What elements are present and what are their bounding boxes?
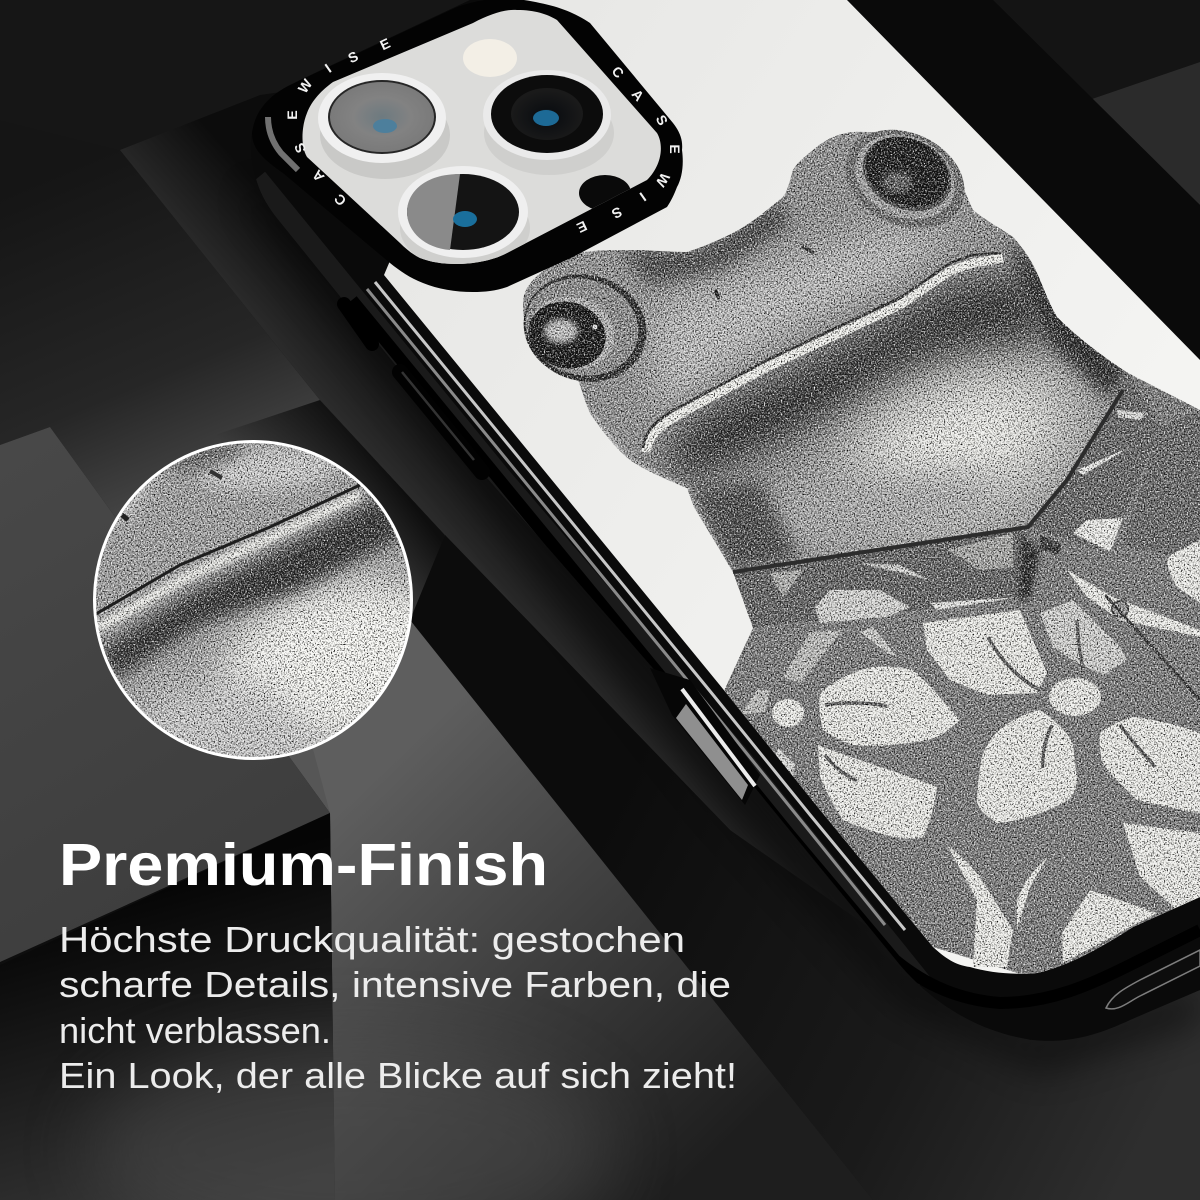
shadow band under lip bbox=[100, 495, 405, 680]
brand ring lettering: I bbox=[637, 189, 649, 205]
brand ring lettering: W bbox=[652, 170, 673, 191]
body text: scharfe Details, intensive Farben, die bbox=[59, 964, 731, 1005]
brand ring lettering: A bbox=[629, 86, 647, 104]
nostrils bbox=[715, 290, 719, 299]
lit muzzle bbox=[650, 225, 960, 420]
flower veins bbox=[825, 620, 1155, 781]
brand ring lettering: S bbox=[291, 141, 309, 155]
brand ring lettering: S bbox=[345, 48, 361, 66]
body text bbox=[59, 919, 737, 1096]
body text: Ein Look, der alle Blicke auf sich zieht! bbox=[59, 1055, 737, 1096]
lower lit area bbox=[196, 551, 474, 779]
placket shadow bbox=[1018, 535, 1040, 600]
side port bbox=[344, 304, 372, 344]
brand ring lettering: E bbox=[377, 35, 393, 53]
lapel bbox=[1028, 373, 1160, 552]
body text: Höchste Druckqualität: gestochen bbox=[59, 919, 685, 960]
brand ring lettering: I bbox=[322, 60, 334, 76]
case shadow bbox=[250, 190, 1200, 1070]
neck edge bbox=[590, 412, 734, 572]
nostril marks bbox=[210, 471, 222, 478]
brand ring lettering: E bbox=[284, 110, 300, 120]
volume button bbox=[400, 372, 482, 472]
mouth crease bbox=[96, 485, 360, 614]
window with iPhone glass bbox=[302, 10, 661, 264]
title: Premium-Finish bbox=[59, 832, 548, 898]
brand ring lettering: S bbox=[609, 204, 625, 222]
collar left bbox=[733, 527, 1028, 628]
printed back surface bbox=[384, 0, 1200, 974]
chin light bbox=[824, 339, 1096, 551]
right jowl shadow bbox=[1010, 235, 1128, 400]
shirt bbox=[723, 373, 1200, 980]
side button with glint bbox=[650, 668, 760, 805]
phone case bbox=[250, 0, 1200, 1070]
left eye bbox=[524, 274, 646, 382]
brand ring lettering: W bbox=[295, 75, 316, 96]
camera bump bbox=[252, 0, 683, 292]
case lip highlight bbox=[268, 117, 298, 170]
flash bbox=[463, 39, 517, 77]
case body bbox=[251, 0, 1200, 1041]
lens one bbox=[318, 73, 450, 179]
mouth line bbox=[646, 258, 1003, 452]
bump outer frame bbox=[252, 0, 683, 292]
lens two bbox=[483, 70, 614, 175]
brand ring lettering: C bbox=[331, 191, 349, 209]
speaker grille bbox=[1106, 950, 1200, 1009]
right eye bbox=[846, 130, 964, 228]
frog head bbox=[511, 111, 1128, 580]
brand ring lettering bbox=[284, 35, 683, 236]
brand ring lettering: S bbox=[653, 112, 671, 128]
shadow below lip bbox=[660, 275, 1050, 480]
case side sheen and stripes bbox=[255, 180, 1200, 1003]
body text: nicht verblassen. bbox=[59, 1010, 331, 1051]
chin and collar outline bbox=[733, 390, 1123, 572]
brand ring lettering: C bbox=[609, 63, 627, 81]
upper highlight bbox=[199, 444, 341, 496]
brand ring lettering: E bbox=[574, 218, 590, 236]
lens three bbox=[398, 166, 530, 270]
lip highlight bbox=[98, 495, 360, 628]
dark crown bbox=[620, 200, 790, 285]
brand ring lettering: A bbox=[309, 167, 327, 185]
zoom detail circle bbox=[93, 440, 413, 760]
brand ring lettering: E bbox=[667, 144, 683, 154]
shirt flowers bbox=[740, 533, 1200, 967]
microphone hole bbox=[579, 175, 631, 211]
